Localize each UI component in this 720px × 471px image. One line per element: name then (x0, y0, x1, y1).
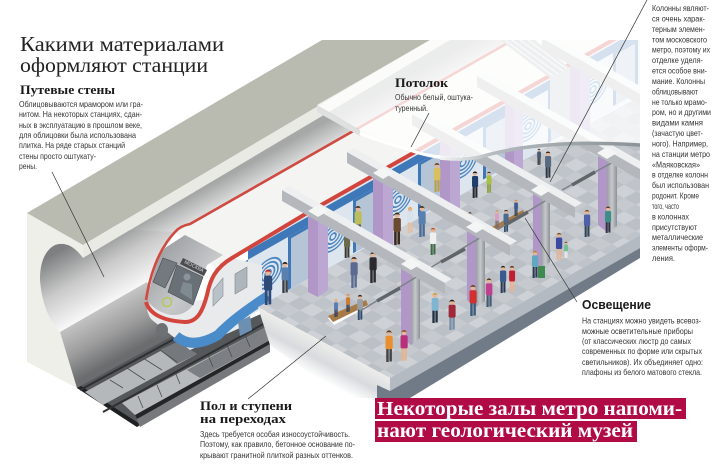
text block: track walls: Облицовываются мрамором или гра- (19, 99, 143, 109)
platform passengers (385, 206, 611, 362)
text block: columns: мание. Колонны (652, 76, 705, 86)
text block: columns: на станции метро (652, 149, 710, 159)
front row columns (401, 148, 617, 345)
platform floor with tiles (258, 96, 640, 378)
text block: lighting (582, 297, 703, 377)
text block: columns: ного). Например, (652, 138, 708, 148)
text block: floors and steps: Поэтому, как правило, бетонное основание по- (200, 439, 355, 449)
title: оформляют станции (20, 53, 208, 77)
text block: ceiling: туренный. (395, 103, 428, 113)
tunnel lower wall (60, 282, 172, 388)
text block: floors and steps: Здесь требуется особая износоустойчивость. (200, 429, 350, 439)
text block: columns: облицовывают (652, 86, 698, 96)
ceiling slab edge (317, 105, 360, 136)
lighting fixtures (360, 160, 617, 311)
tunnel front face (27, 213, 83, 388)
text block: columns: отделке уделя- (652, 55, 703, 65)
text block: columns: терным элемен- (652, 24, 705, 34)
destination board (180, 258, 207, 276)
tunnel roof top face (27, 40, 430, 245)
text block: columns: в отделке колонн (652, 170, 708, 180)
text block: track walls: для облицовки была использована (19, 130, 136, 140)
text block: columns: том московского (652, 34, 707, 44)
ceiling beams (282, 34, 647, 294)
coupler (156, 323, 168, 332)
text block: columns (652, 3, 711, 263)
cab side window (213, 278, 223, 306)
ceiling cut white edge (360, 133, 480, 159)
ribbed ceiling element (500, 40, 570, 130)
platform side (390, 235, 640, 391)
train roof (176, 130, 410, 268)
text block: track walls: ных в эксплуатацию в прошлом веке, (19, 120, 142, 130)
front silver face (148, 235, 223, 315)
highlighted callout (375, 398, 686, 442)
ceiling cut ribbon (440, 143, 640, 159)
benches with seated passengers (328, 200, 525, 325)
platform front edge (258, 307, 390, 398)
text block: columns: ления. (652, 253, 675, 263)
text block: track walls: нитом. На некоторых станциях, сдан- (19, 109, 142, 119)
text block: columns: ется особое вни- (652, 66, 707, 76)
text block: columns: (зачастую цвет- (652, 128, 703, 138)
text block: lighting: На станциях можно увидеть всевоз- (582, 316, 701, 326)
train undercarriage (238, 316, 252, 336)
back row columns (308, 57, 590, 297)
tunnel roof light strip (83, 106, 323, 256)
track bed (77, 310, 270, 427)
text block: floors and steps: на переходах (200, 411, 287, 426)
text block: ceiling: Обычно белый, оштука- (395, 92, 473, 102)
train cab hull (146, 258, 262, 350)
text block: track walls: рены. (19, 161, 37, 171)
text block: lighting: (от классических люстр до самых (582, 336, 692, 346)
leader lines (52, 0, 647, 399)
tunnel upper wall (83, 40, 520, 262)
upper red line (146, 36, 520, 300)
text block: columns: «Маяковская» (652, 159, 700, 169)
text block: track walls: Путевые стены (20, 82, 115, 97)
station cutaway illustration (27, 40, 640, 427)
train (144, 40, 638, 350)
destination board: МОСКВА (183, 259, 205, 274)
text block: floors and steps: крывают гранитной плиткой разных оттенков. (200, 450, 353, 460)
text block: floors and steps: Пол и ступени (200, 398, 293, 413)
text block: track walls: плитка. На ряде старых станций (19, 140, 125, 150)
text block: ceiling: Потолок (395, 75, 449, 90)
text block: columns: того, часто (652, 201, 679, 211)
passengers near the train (264, 149, 551, 305)
text block: lighting: светильников). Их объединяет одно: (582, 357, 703, 367)
door window (235, 267, 247, 294)
text block: columns: родонит. Кроме (652, 191, 699, 201)
title (20, 32, 224, 77)
text block: columns: в колоннах (652, 211, 690, 221)
tunnel arch opening (40, 230, 175, 332)
text block: ceiling (395, 75, 473, 113)
highlighted callout: нают геологический музей (377, 420, 633, 442)
highlighted callout: Некоторые залы метро напоми- (377, 398, 682, 420)
text block: columns: металлические (652, 232, 703, 242)
text block: columns: присутствуют (652, 222, 697, 232)
text block: track walls: стены просто оштукату- (19, 151, 96, 161)
title: Какими материалами (20, 32, 224, 56)
platform dark side (377, 248, 640, 398)
text block: columns: Колонны являют- (652, 3, 709, 13)
metro logo (162, 298, 172, 306)
text block: columns: ся очень харак- (652, 13, 705, 23)
blue lower stripe (176, 296, 268, 343)
text block: floors and steps (200, 398, 355, 460)
text block: columns: видами камня (652, 118, 703, 128)
text block: lighting: Освещение (582, 297, 651, 312)
train side with doors and wall pattern (245, 40, 638, 314)
text block: columns: был использован (652, 180, 709, 190)
text block: lighting: можные осветительные приборы (582, 326, 693, 336)
lower red line (146, 36, 620, 322)
translucent cut-away ceiling (317, 40, 640, 157)
text block: track walls (19, 82, 143, 171)
text block: columns: не только мрамо- (652, 97, 707, 107)
right windscreen with driver (168, 265, 203, 305)
left windscreen (153, 258, 177, 288)
